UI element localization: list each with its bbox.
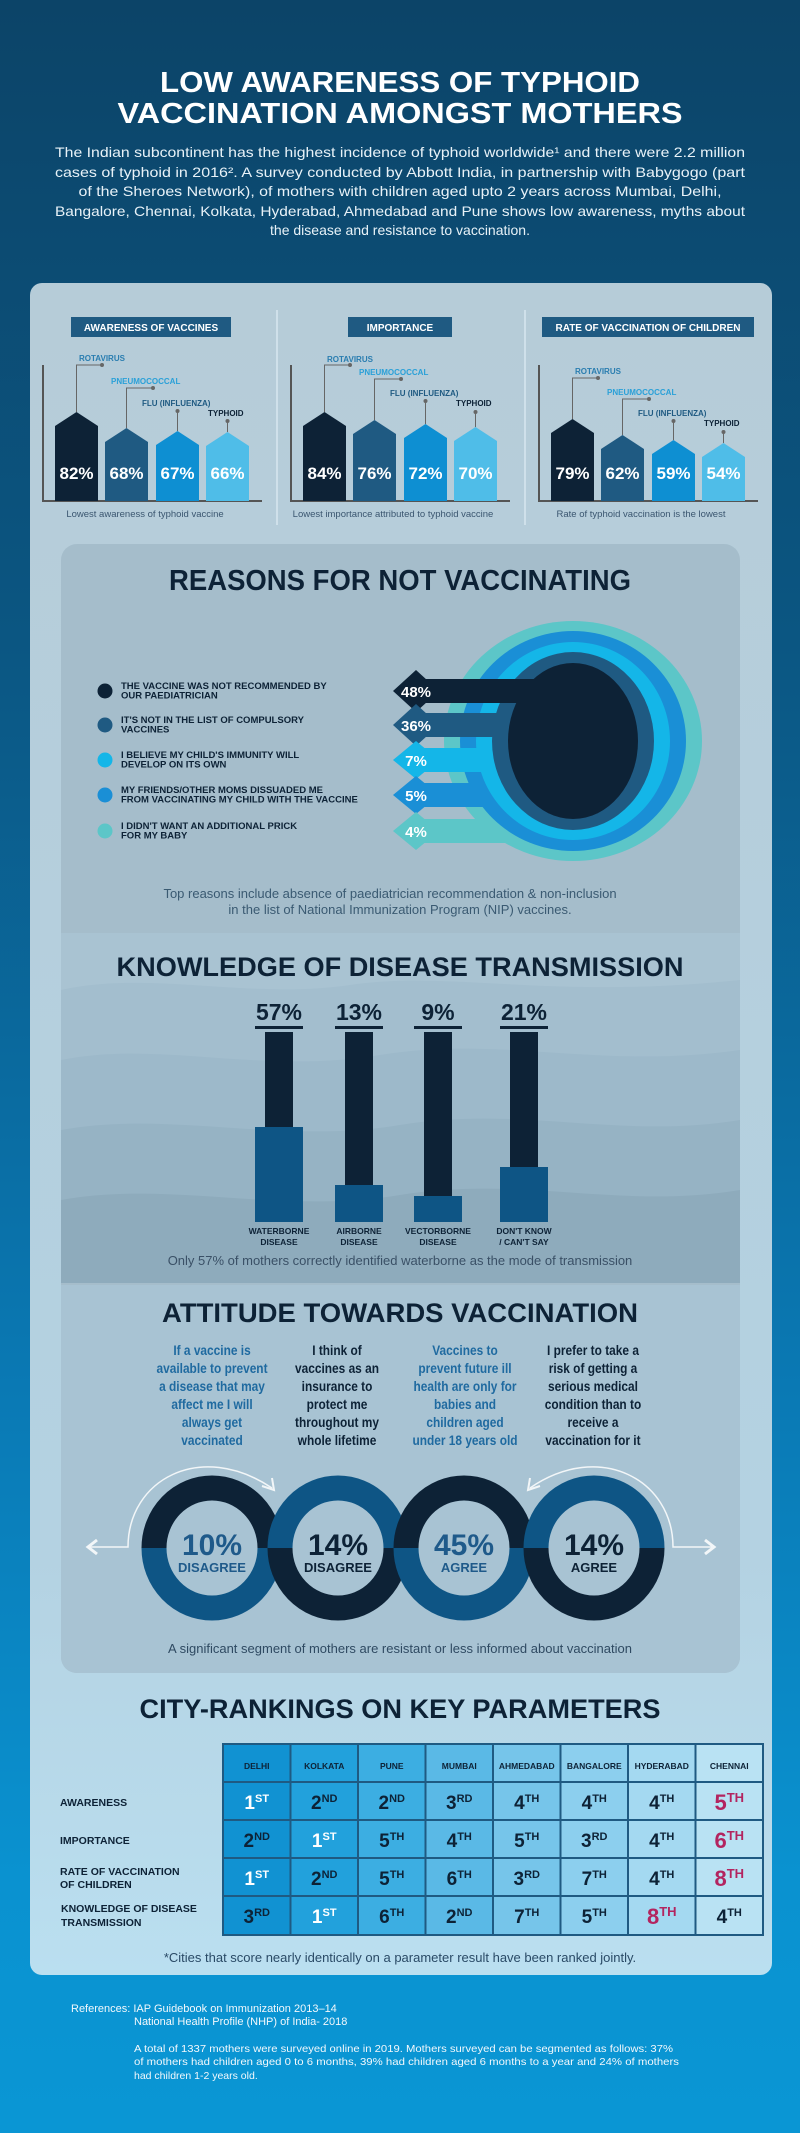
table: RD [592, 1831, 608, 1843]
table [223, 1744, 763, 1935]
chart: importance: ROTAVIRUS [327, 355, 374, 364]
bar chart: transmission: 21% [501, 999, 547, 1025]
statements: a disease that may [159, 1378, 266, 1394]
intro paragraph: The Indian subcontinent has the highest incidence of typhoid worldwide¹ and there were 2.2 million [55, 144, 745, 160]
table: 6 [379, 1907, 390, 1928]
percentage markers: 36% [401, 718, 431, 735]
table: ST [323, 1907, 337, 1919]
references: of mothers had children aged 0 to 6 months, 39% had children aged 6 months to a year and 24% of mothers [134, 2056, 679, 2068]
chart: awareness of vaccines: Lowest awareness of typhoid vaccine [66, 509, 224, 520]
ring labels: 45% [434, 1529, 494, 1562]
table: HYDERABAD [635, 1761, 689, 1771]
table: MUMBAI [442, 1761, 477, 1771]
table: 4 [649, 1831, 660, 1852]
bar chart: transmission: DISEASE [419, 1237, 457, 1247]
legend items: FROM VACCINATING MY CHILD WITH THE VACCINE [121, 794, 358, 806]
intro paragraph: the disease and resistance to vaccination. [270, 222, 530, 238]
statements: If a vaccine is [173, 1342, 251, 1358]
bar charts: vaccines [43, 310, 758, 525]
table: 4 [649, 1793, 660, 1814]
caption: knowledge: Only 57% of mothers correctly identified waterborne as the mode of transmission [168, 1253, 632, 1268]
table: 6 [714, 1828, 727, 1853]
chart: awareness of vaccines: FLU (INFLUENZA) [142, 399, 211, 408]
inner panel background [61, 544, 740, 1673]
legend items: I DIDN'T WANT AN ADDITIONAL PRICK [121, 821, 297, 832]
table: TH [525, 1907, 539, 1919]
table: RD [524, 1869, 540, 1881]
row labels [60, 1797, 197, 1929]
chart: rate of vaccination: PNEUMOCOCCAL [607, 388, 676, 397]
intro paragraph: of the Sheroes Network), of mothers with children aged upto 2 years across Mumbai, Delhi, [78, 183, 721, 199]
chart: importance: Lowest importance attributed to typhoid vaccine [293, 509, 493, 520]
chart: importance: 72% [408, 464, 443, 483]
references: had children 1-2 years old. [134, 2070, 258, 2082]
table: TH [592, 1869, 607, 1881]
bar chart: transmission: 13% [336, 999, 382, 1025]
statements: health are only for [413, 1378, 517, 1394]
statements: serious medical [548, 1378, 638, 1394]
statements: whole lifetime [297, 1432, 376, 1448]
table: TH [727, 1828, 744, 1843]
caption: reasons: in the list of National Immunization Program (NIP) vaccines. [228, 902, 572, 917]
row labels: RATE OF VACCINATION [60, 1866, 180, 1878]
row labels: KNOWLEDGE OF DISEASE [61, 1903, 197, 1915]
table: TH [727, 1790, 744, 1805]
statements: risk of getting a [549, 1360, 638, 1376]
statements: vaccination for it [545, 1432, 641, 1448]
chart: rate of vaccination: Rate of typhoid vaccination is the lowest [557, 509, 726, 520]
table: 3 [514, 1869, 524, 1890]
ring labels [178, 1529, 624, 1575]
chart: importance: 76% [357, 464, 392, 483]
title: VACCINATION AMONGST MOTHERS [118, 98, 682, 130]
table: TH [525, 1793, 539, 1805]
table: 1 [244, 1793, 255, 1814]
statements: vaccines as an [295, 1360, 379, 1376]
statements: available to prevent [156, 1360, 268, 1376]
percentage markers: 4% [405, 824, 427, 841]
statements: protect me [307, 1396, 367, 1412]
bar chart: transmission: DON'T KNOW [496, 1226, 553, 1236]
references: National Health Profile (NHP) of India- 2018 [134, 2016, 347, 2028]
chart: importance [291, 317, 510, 520]
chart: awareness of vaccines: ROTAVIRUS [79, 354, 126, 363]
ring labels: AGREE [571, 1560, 617, 1575]
chart: awareness of vaccines [43, 317, 262, 520]
statements: condition than to [545, 1396, 641, 1412]
table: TH [659, 1904, 677, 1919]
table: ND [254, 1831, 270, 1843]
ring labels: AGREE [441, 1560, 487, 1575]
table: 2 [244, 1831, 254, 1852]
row labels: TRANSMISSION [61, 1917, 142, 1929]
arrow: right [528, 1467, 714, 1554]
heading: knowledge: KNOWLEDGE OF DISEASE TRANSMISSION [116, 952, 684, 982]
legend items: DEVELOP ON ITS OWN [121, 760, 227, 770]
table: AHMEDABAD [499, 1761, 555, 1771]
bar chart: transmission: DISEASE [260, 1237, 298, 1247]
references [71, 2003, 679, 2082]
bar chart: transmission: / CAN'T SAY [499, 1237, 549, 1247]
table: 4 [649, 1869, 660, 1890]
table: 5 [514, 1831, 525, 1852]
heading: reasons: REASONS FOR NOT VACCINATING [169, 565, 631, 597]
bar chart: transmission: DISEASE [340, 1237, 378, 1247]
statements: insurance to [302, 1378, 372, 1394]
heading: city rankings: CITY-RANKINGS ON KEY PARAMETERS [140, 1694, 660, 1724]
percentage markers: 5% [405, 788, 427, 805]
caption: attitude: A significant segment of mothers are resistant or less informed about vaccination [168, 1641, 632, 1656]
chart: importance: IMPORTANCE [367, 323, 434, 334]
statements: affect me I will [171, 1396, 253, 1412]
table: 1 [312, 1831, 323, 1852]
bar chart: transmission: 57% [256, 999, 302, 1025]
table: CHENNAI [710, 1761, 749, 1771]
table: 5 [379, 1831, 390, 1852]
table: ND [389, 1793, 405, 1805]
table: 2 [446, 1907, 457, 1928]
references: A total of 1337 mothers were surveyed online in 2019. Mothers surveyed can be segmented as follows: 37% [134, 2043, 673, 2055]
chart: awareness of vaccines: TYPHOID [208, 409, 244, 418]
bar chart: transmission: WATERBORNE [249, 1226, 310, 1236]
statements: babies and [434, 1396, 496, 1412]
table: 5 [582, 1907, 592, 1928]
chart: awareness of vaccines: 67% [160, 464, 195, 483]
panel: city rankings [60, 1694, 763, 1965]
bar chart: transmission: AIRBORNE [336, 1226, 382, 1236]
table: 7 [582, 1869, 592, 1890]
legend items: VACCINES [121, 724, 169, 736]
legend items: IT'S NOT IN THE LIST OF COMPULSORY [121, 715, 305, 726]
table: 2 [311, 1869, 322, 1890]
chart: importance: FLU (INFLUENZA) [390, 389, 459, 398]
table: TH [592, 1907, 607, 1919]
ring labels: 14% [308, 1529, 368, 1562]
table: TH [457, 1831, 472, 1843]
table: 8 [714, 1866, 727, 1891]
percentage markers: 48% [401, 684, 431, 701]
chart: rate of vaccination: RATE OF VACCINATION OF CHILDREN [556, 323, 740, 334]
legend items: FOR MY BABY [121, 830, 188, 842]
statements: I prefer to take a [547, 1342, 640, 1358]
table: ST [255, 1793, 269, 1805]
statements: children aged [426, 1414, 504, 1430]
statements: I think of [312, 1342, 362, 1358]
footnote: *Cities that score nearly identically on a parameter result have been ranked jointly. [164, 1950, 636, 1965]
percentage markers: 7% [405, 753, 427, 770]
table: 2 [379, 1793, 389, 1814]
legend items: MY FRIENDS/OTHER MOMS DISSUADED ME [121, 785, 323, 796]
table: DELHI [244, 1761, 270, 1771]
chart: rate of vaccination: 59% [656, 464, 691, 483]
table: 6 [447, 1869, 457, 1890]
ring labels: 14% [564, 1529, 624, 1562]
table: RD [254, 1907, 270, 1919]
intro paragraph: Bangalore, Chennai, Kolkata, Hyderabad, Ahmedabad and Pune shows low awareness, myths about [55, 203, 745, 219]
chart: rate of vaccination: ROTAVIRUS [575, 367, 622, 376]
panel: reasons for not vaccinating [98, 565, 702, 917]
chart: awareness of vaccines: 66% [210, 464, 245, 483]
statements: Vaccines to [432, 1342, 498, 1358]
statements: vaccinated [181, 1432, 243, 1448]
ring labels: DISAGREE [178, 1560, 246, 1575]
legend items: THE VACCINE WAS NOT RECOMMENDED BY [121, 681, 327, 692]
chart: rate of vaccination: 62% [605, 464, 640, 483]
table: 2 [311, 1793, 322, 1814]
intro paragraph: cases of typhoid in 2016². A survey conducted by Abbott India, in partnership with Babygogo (part [55, 164, 745, 180]
row labels: OF CHILDREN [60, 1879, 132, 1891]
table: TH [660, 1793, 674, 1805]
legend items: OUR PAEDIATRICIAN [121, 690, 218, 702]
bar chart: transmission: VECTORBORNE [405, 1226, 471, 1236]
table: PUNE [380, 1761, 404, 1771]
table: 4 [514, 1793, 525, 1814]
table: 3 [244, 1907, 254, 1928]
table: 1 [312, 1907, 323, 1928]
chain rings [154, 1488, 652, 1608]
ring labels: DISAGREE [304, 1560, 372, 1575]
row labels: AWARENESS [60, 1797, 127, 1809]
table: ST [323, 1831, 337, 1843]
title [118, 67, 682, 130]
statements: always get [182, 1414, 243, 1430]
table: TH [660, 1869, 674, 1881]
chart: rate of vaccination [539, 317, 758, 520]
table: 3 [446, 1793, 457, 1814]
statements: under 18 years old [412, 1432, 518, 1448]
caption: reasons: Top reasons include absence of paediatrician recommendation & non-inclusion [163, 886, 617, 901]
ring labels: 10% [182, 1529, 242, 1562]
chart: importance: TYPHOID [456, 399, 492, 408]
panel: knowledge of disease transmission [61, 933, 740, 1283]
intro paragraph [55, 144, 745, 238]
chart: awareness of vaccines: 68% [109, 464, 144, 483]
table: TH [525, 1831, 539, 1843]
table: 5 [714, 1790, 727, 1815]
statements [156, 1342, 641, 1448]
table: KOLKATA [304, 1761, 344, 1771]
table: ND [322, 1793, 338, 1805]
statements: prevent future ill [418, 1360, 512, 1376]
arrow: left [88, 1467, 274, 1554]
legend items: I BELIEVE MY CHILD'S IMMUNITY WILL [121, 750, 299, 761]
title: LOW AWARENESS OF TYPHOID [160, 67, 640, 99]
table: 5 [379, 1869, 390, 1890]
table: ND [457, 1907, 473, 1919]
table: ST [255, 1869, 269, 1881]
table: TH [457, 1869, 472, 1881]
chart: rate of vaccination: 54% [706, 464, 741, 483]
table: 3 [581, 1831, 592, 1852]
legend items [98, 681, 358, 842]
table: BANGALORE [567, 1761, 622, 1771]
heading: attitude: ATTITUDE TOWARDS VACCINATION [162, 1298, 638, 1328]
bar chart: transmission: 9% [421, 999, 455, 1025]
table: TH [660, 1831, 674, 1843]
statements: receive a [568, 1414, 619, 1430]
chart: concentric rings [416, 621, 702, 861]
caption: reasons [163, 886, 617, 917]
statements: throughout my [295, 1414, 380, 1430]
table: TH [592, 1793, 607, 1805]
table: 4 [447, 1831, 457, 1852]
table: 4 [582, 1793, 592, 1814]
chart: rate of vaccination: 79% [555, 464, 590, 483]
chart: awareness of vaccines: PNEUMOCOCCAL [111, 377, 180, 386]
chart: importance: PNEUMOCOCCAL [359, 368, 428, 377]
chart: awareness of vaccines: 82% [59, 464, 94, 483]
table: 8 [647, 1904, 659, 1929]
table: 7 [514, 1907, 525, 1928]
table: ND [322, 1869, 338, 1881]
panel: attitude towards vaccination [61, 1285, 740, 1673]
table: TH [390, 1907, 404, 1919]
table: RD [457, 1793, 473, 1805]
chart: rate of vaccination: FLU (INFLUENZA) [638, 409, 707, 418]
table: 4 [717, 1907, 727, 1928]
table: TH [727, 1866, 744, 1881]
bar chart: transmission [249, 999, 553, 1247]
chart: importance: 70% [458, 464, 493, 483]
table: TH [727, 1907, 742, 1919]
chart: rate of vaccination: TYPHOID [704, 419, 740, 428]
row labels: IMPORTANCE [60, 1835, 130, 1847]
chart: importance: 84% [307, 464, 342, 483]
references: References: IAP Guidebook on Immunization 2013–14 [71, 2003, 337, 2015]
table: TH [390, 1831, 404, 1843]
chart: awareness of vaccines: AWARENESS OF VACCINES [84, 323, 218, 334]
percentage markers [393, 670, 439, 850]
main panel [30, 283, 772, 1975]
table: 1 [244, 1869, 255, 1890]
table: TH [390, 1869, 404, 1881]
